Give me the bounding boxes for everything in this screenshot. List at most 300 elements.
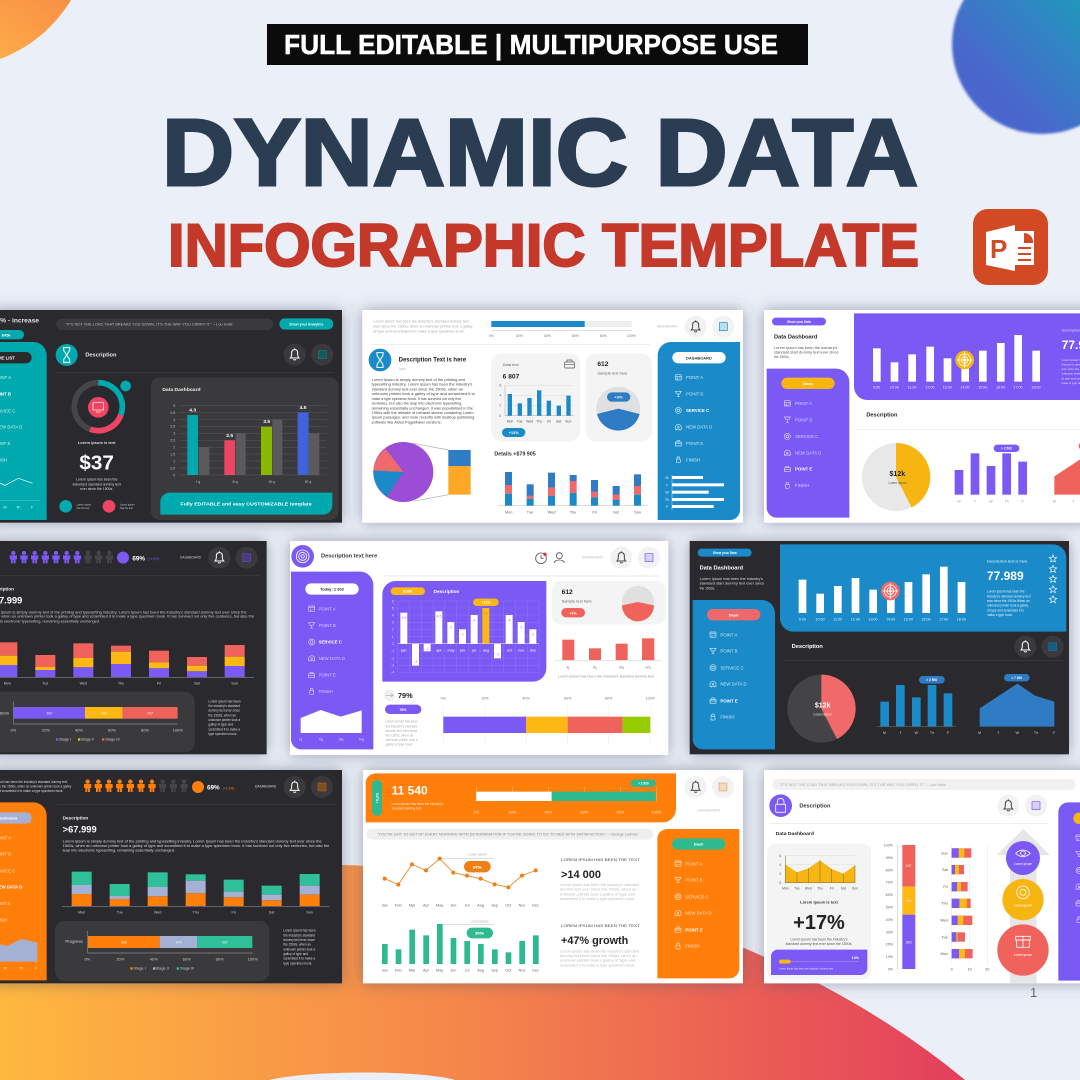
bar chart: 2 (173, 446, 175, 450)
body text: Lorem Ipsum is simply dummy text of the printing and (372, 378, 465, 382)
panel: hourly bar chart: 11:00 (908, 386, 916, 390)
progress bar: 20% (508, 810, 517, 814)
heading block: Lorem Ipsum has been the industry's (700, 577, 763, 581)
sidebar: NEW DATA D (720, 682, 747, 687)
metric: 79 percent: 78% (399, 708, 407, 712)
metric: 37 dollars: $37 (79, 451, 114, 474)
bar chart: IV q (305, 480, 311, 484)
metric: 37 dollars (73, 440, 121, 491)
metric: 47 percent growth: dummy text ever since the 1500s, when an (560, 954, 637, 958)
area chart: 6 (779, 854, 781, 858)
sidebar: POINT B (720, 649, 738, 654)
button: show analytics (279, 318, 333, 330)
bar chart: Oct (505, 969, 512, 973)
sidebar: POINT E (319, 673, 336, 678)
stacked bar chart: Mon (78, 910, 85, 914)
bar chart: 0 (499, 414, 501, 418)
panel: purple dark dashboard (0, 541, 267, 754)
heading block: Data Dashboard (700, 566, 744, 572)
panel: 612 sample: 612 (562, 589, 573, 596)
panel: progress chart: 389 (46, 711, 52, 715)
heading block: Lorem Ipsum has been the industry's (774, 346, 838, 350)
body text: remaining essentially unchanged. It was popularised in the (372, 406, 473, 410)
panel: progress chart: 80% (141, 728, 149, 733)
sidebar: SERVICE C (720, 665, 744, 670)
chart: details stacked bars: Details +$79 905 (494, 452, 536, 458)
heading: description: Description (792, 644, 823, 650)
panel: 612 sample: +3% (569, 611, 577, 615)
bar chart: Lorem ipsum (471, 919, 489, 923)
metric: 14 000: >14 000 (561, 869, 601, 881)
area chart: F (1053, 731, 1056, 735)
sidebar: POINT B (685, 878, 703, 883)
metric: 37 dollars: Lorem Ipsum has been the (76, 478, 117, 482)
side text: Lorem Ipsum has been (283, 929, 316, 933)
chart: details stacked bars: Mon (505, 510, 512, 514)
panel: hourly bar chart: 15:00 (904, 617, 913, 621)
bar chart: Fri (547, 419, 551, 423)
decorative bottom gradient shape (0, 865, 965, 1080)
side text: the 1500s, when an (208, 713, 236, 717)
metric: 47 percent growth: Lorem Ipsum has been the industry's standard (560, 949, 640, 953)
description text: leap into electronic typesetting, remaining essentially unchanged. (63, 849, 175, 853)
bar chart: III q (269, 480, 275, 484)
bar chart: Thu (536, 419, 542, 423)
stacked column chart: 0% (888, 967, 894, 971)
sidebar: SERVICE C (795, 434, 818, 439)
panel: progress chart: 60% (183, 957, 191, 962)
progress bar: 100% (651, 810, 662, 814)
panel: monthly bar chart: dec (530, 649, 536, 653)
panel: area chart and metric: +17% (793, 912, 845, 934)
horizontal stacked bar chart: 10 (968, 968, 972, 972)
progress banner: Lorem Ipsum has been the industry's dummy text (779, 968, 833, 971)
stacked bar chart: Wed (154, 910, 161, 914)
panel: teal dark dashboard (0, 310, 342, 523)
sidebar: FINISH (685, 944, 700, 949)
bar chart: M (883, 731, 886, 735)
legend: Lorem Ipsum (120, 504, 134, 507)
metric: 47 percent growth: unknown printer took a galley of type and (560, 959, 636, 963)
panel: 612 sample: Sample text here (597, 371, 628, 376)
bar chart: T (974, 499, 977, 503)
icon: target circle (291, 545, 314, 568)
panel: monthly bar chart: 6 (392, 599, 394, 603)
progress bar: 20% (516, 334, 523, 338)
stacked column chart: 80% (886, 868, 894, 872)
chart: details stacked bars: Tue (527, 510, 533, 514)
stacked bar chart (62, 872, 329, 914)
intro text: ever since the 1500s, when an unknown printer took a galley (373, 324, 473, 328)
line chart: Jan (382, 904, 388, 908)
chart: details stacked bars: Wed (548, 510, 556, 514)
bar chart: Aug (477, 969, 484, 973)
icon buttons: DASHBOARD (180, 556, 202, 560)
legend: Lorem Ipsum (77, 504, 91, 507)
chart: details stacked bars (494, 452, 648, 514)
panel: monthly bar chart: -3 (391, 664, 394, 668)
stacked bar chart: Thu (193, 910, 199, 914)
panel: progress chart: Stage I (59, 738, 71, 742)
panel: monthly bar chart: oct (507, 649, 512, 653)
bar chart: F (947, 731, 950, 735)
people icons (84, 779, 188, 792)
panel: monthly bar chart: 4.5 (437, 615, 441, 619)
side text: dummy text ever since (208, 709, 240, 713)
sidebar: F (666, 505, 668, 509)
bar chart: > 2 500 (926, 678, 937, 682)
horizontal stacked bar chart: 0 (951, 968, 953, 972)
panel: hourly bar chart: 15:00 (978, 386, 987, 390)
panel: progress chart: 0% (84, 957, 91, 962)
panel: area chart and metric: Lorem Ipsum is text (800, 899, 838, 904)
panel: purple light dashboard (764, 310, 1080, 523)
line chart: Jul (465, 904, 470, 908)
legend: has the text (120, 507, 133, 510)
chart: details stacked bars: Sun (634, 510, 641, 514)
metric: 14 000: dummy text ever since the 1500s, when an (560, 888, 637, 892)
area chart: M (978, 731, 981, 735)
bar chart (499, 384, 573, 423)
panel: hourly bar chart: 14:00 (886, 617, 895, 621)
panel: progress chart: Progress (65, 939, 83, 944)
stacked column chart: 70% (886, 881, 894, 885)
panel: monthly bar chart: 5 (485, 611, 487, 615)
metric: 69 percent: 69% (207, 785, 220, 792)
panel: hourly bar chart: 14:00 (960, 386, 970, 390)
icon: target (881, 582, 900, 600)
sidebar: FINISH (720, 715, 735, 720)
area chart: Mon (782, 886, 789, 890)
line chart: Jun (450, 904, 456, 908)
panel: progress chart: 204 (101, 711, 107, 715)
metric: 79 percent: the industry's standard (386, 724, 418, 728)
horizontal stacked bar chart: Tue (941, 935, 948, 939)
quote bar: "YOU'VE GOT TO GET UP EVERY MORNING WITH DETERMINATION IF YOU'RE GOING TO GO TO BED WITH SATISFACTION." – George Lorimer (377, 833, 639, 837)
sidebar (0, 342, 47, 520)
pie chart (787, 675, 856, 743)
metric: 79 percent: dummy text ever since (386, 729, 417, 733)
bar chart: quarters: IVq (645, 665, 651, 669)
side text: galley of type and (283, 952, 308, 956)
sidebar: Today: 1 302 (320, 587, 345, 592)
progress bar (489, 321, 636, 338)
heading: description text: Description Text is here (399, 357, 467, 363)
icon buttons: DASHBOARD (255, 784, 277, 788)
bar chart: $55k (475, 931, 485, 936)
body text: typesetting industry. Lorem Ipsum has been the industry's (372, 383, 473, 387)
side text: dummy text ever since (283, 938, 315, 942)
arrow with circles: Lorem ipsum (1014, 904, 1032, 908)
metric: 14 000: scrambled it to make a type specimen book. (560, 897, 635, 901)
side text: type specimen book. (208, 732, 237, 736)
panel: hourly bar chart (854, 313, 1080, 400)
area chart: Tue (794, 886, 800, 890)
heading block (774, 335, 839, 359)
sidebar: T (666, 483, 669, 487)
panel: 612 sample (585, 353, 652, 442)
sidebar: W (3, 506, 7, 510)
stacked column chart: 10% (886, 955, 894, 959)
pill: show data: Show your Data (713, 551, 737, 555)
pie chart (373, 442, 471, 502)
stacked progress bar: 80% (605, 697, 613, 701)
intro text (0, 780, 72, 793)
stacked column chart: 60% (886, 893, 894, 897)
icon buttons (1014, 636, 1064, 658)
subtitle: infographic template: INFOGRAPHIC TEMPLATE (168, 212, 919, 279)
bar chart: 3.5 (263, 419, 270, 425)
panel: hourly bar chart: 12:00 (925, 386, 935, 390)
stacked column chart: 389 (906, 940, 912, 944)
side text: the industry's standard (283, 933, 315, 937)
side text: scrambled it to make a (208, 727, 240, 731)
stacked bar chart: Mon (4, 682, 11, 686)
sidebar: POINT A (319, 606, 336, 611)
stacked column chart: 297 (906, 864, 912, 868)
bar chart: Mar (409, 969, 416, 973)
metric: 14 000: unknown printer took a galley of type and (560, 892, 636, 896)
panel: monthly bar chart: -4 (391, 671, 394, 675)
pill: show data: Show your Data (787, 320, 811, 324)
sidebar (657, 829, 739, 978)
panel: progress chart: Stage II (81, 738, 94, 742)
stacked bar chart: Wed (80, 682, 87, 686)
description text (63, 815, 329, 853)
icon: hourglass (369, 349, 391, 371)
sidebar: POINT A (685, 861, 702, 866)
panel: data text: +13% (509, 430, 519, 435)
panel: purple light dashboard 3 (764, 770, 1080, 983)
sidebar: SERVICE C (685, 894, 709, 899)
bar chart: quarters: IIIq (619, 665, 624, 669)
line chart: May (436, 904, 443, 908)
panel: data text: 6 807 (503, 373, 520, 380)
body text: standard dummy text ever since the 1500s, when an (372, 387, 463, 391)
sidebar: POINT E (795, 467, 812, 472)
panel: monthly bar chart: 3 (450, 625, 452, 629)
icon buttons (255, 776, 333, 798)
icons: stars (1049, 555, 1057, 603)
panel: hourly bar chart: 12:00 (851, 617, 860, 621)
panel: monthly bar chart: -2 (391, 656, 394, 660)
line chart: Lorem ipsum (468, 853, 487, 857)
side text: unknown printer took a (283, 947, 316, 951)
description text: Description (63, 815, 88, 820)
quote bar: "IT'S NOT THE LOAD THAT BREAKS YOU DOWN, IT'S THE WAY YOU CARRY IT." – Lou Holtz (779, 783, 946, 787)
stacked progress bar (441, 697, 656, 746)
horizontal stacked bar chart: 20 (985, 968, 989, 972)
panel: progress chart: 40% (150, 957, 158, 962)
bar chart: 4.5 (300, 405, 307, 411)
sidebar: Th (16, 506, 20, 510)
panel: progress chart: 389 (121, 940, 127, 944)
body text: software like Aldus PageMaker versions. (372, 421, 442, 425)
line chart: Mar (409, 904, 416, 908)
sidebar (0, 802, 47, 980)
bar chart: W (915, 731, 919, 735)
panel: top orange metric: standard dummy text (392, 807, 421, 811)
side text: unknown printer took a (208, 718, 241, 722)
sidebar: F (36, 966, 39, 970)
bar chart: > 2 500 (1001, 447, 1012, 451)
sidebar: POINT B (686, 392, 703, 397)
bar chart: Dec (532, 969, 539, 973)
sidebar: Iq (299, 738, 302, 742)
sidebar: W (665, 491, 669, 495)
sidebar: Dash (694, 842, 704, 847)
bar chart: Sep (491, 969, 498, 973)
icon buttons (180, 547, 258, 569)
heading block: Data Dashboard (774, 335, 818, 341)
stacked bar chart: Thu (118, 682, 124, 686)
panel: 612 sample: +3% (615, 395, 623, 400)
sidebar: DASHBOARD (686, 355, 712, 360)
area chart: 0 (779, 881, 781, 885)
panel: area chart and metric: standard dummy text ever since the 1500s. (786, 942, 852, 946)
bar chart: quarters: IIq (593, 665, 597, 669)
description text: 1500s, when an unknown printer took a galley of type and scrambled it to make a type specimen book. It has survived not only five centuries, but also the (63, 844, 329, 848)
intro text (373, 320, 473, 333)
sidebar: NEW DATA D (685, 911, 712, 916)
bar chart: Apr (423, 969, 430, 973)
panel: data text (491, 353, 580, 442)
line chart: Feb (395, 904, 402, 908)
bar chart: Nov (519, 969, 525, 973)
metric: 37 dollars: ever since the 1500s. (80, 487, 113, 491)
bar chart: T (899, 731, 902, 735)
bar chart: 0.5 (170, 466, 175, 470)
panel: hourly bar chart: 9:00 (873, 386, 880, 390)
panel: progress chart: 204 (176, 940, 182, 944)
metric: 14 000 (560, 857, 641, 901)
horizontal stacked bar chart (940, 844, 989, 972)
line chart: Apr (423, 904, 430, 908)
stacked column chart: 40% (886, 918, 894, 922)
panel: progress chart (0, 692, 195, 752)
bar chart: Wed (526, 419, 533, 423)
bar chart: Jun (450, 969, 456, 973)
line chart: Nov (519, 904, 525, 908)
panel: monthly bar chart: +12% (482, 601, 490, 605)
side text (208, 699, 241, 736)
pie chart: Lorem ipsum (814, 712, 832, 716)
icon: hourglass (56, 344, 78, 366)
sidebar (658, 342, 740, 520)
stacked bar chart: Sat (269, 910, 274, 914)
bar chart: Th (1005, 499, 1009, 503)
body text (372, 378, 475, 425)
bar chart: 0 (173, 473, 175, 477)
panel: hourly bar chart: unknown printer took a galley (987, 604, 1028, 608)
icon buttons (685, 776, 734, 813)
panel: hourly bar chart: 10:00 (815, 617, 825, 621)
sidebar: IIIq (339, 738, 343, 742)
metric: 37 dollars: industry's standard dummy text (73, 482, 121, 486)
bar chart: 2.5 (226, 433, 233, 439)
line chart: $45k (473, 864, 483, 869)
page number: 1 (1030, 985, 1037, 1000)
heading block: standard start dummy text ever since (774, 350, 839, 354)
arrow with circles: Lorem ipsum (1014, 862, 1032, 866)
sidebar (291, 572, 373, 749)
area chart (1053, 442, 1080, 503)
heading: data dashboard: Data Dashboard (776, 831, 814, 837)
panel: monthly bar chart: apr (436, 649, 442, 653)
sidebar: POINT B (795, 417, 812, 422)
sidebar: POINT E (686, 441, 703, 446)
panel: monthly bar chart: 1 (392, 635, 394, 639)
stacked progress bar: 100% (646, 697, 656, 701)
bar chart (955, 445, 1027, 503)
bar chart: 4.3 (189, 408, 196, 414)
panel: hourly bar chart: of type and scrambled it to (987, 608, 1024, 612)
side text (283, 929, 316, 965)
heading block: the 1500s. (700, 586, 715, 590)
heading block: the 1500s. (774, 355, 790, 359)
panel: progress chart: 20% (42, 728, 50, 733)
panel: monthly bar chart: 4.3 (402, 616, 406, 620)
bar chart: 1 (173, 459, 175, 463)
panel: progress chart: 20% (116, 957, 125, 962)
decorative orange corner (0, 0, 71, 59)
icon: powerpoint: P (990, 234, 1007, 264)
heading block (700, 566, 764, 590)
panel: hourly bar chart: Description text is here (987, 559, 1028, 564)
sidebar: POINT A (795, 401, 812, 406)
sidebar: FINISH (795, 483, 809, 488)
panel: monthly bar chart: 4 (473, 619, 475, 623)
body text: centuries, but also the leap into electronic typesetting, (372, 402, 462, 406)
side text: type specimen book. (283, 961, 312, 965)
quote bar: "IT'S NOT THE LOAD THAT BREAKS YOU DOWN, IT'S THE WAY YOU CARRY IT." – Lou Holtz (65, 323, 233, 327)
side text: the 1500s, when an (283, 943, 311, 947)
stacked bar chart: Sat (194, 682, 200, 686)
stacked column chart (884, 844, 915, 971)
bar chart: Sun (565, 419, 571, 423)
bar chart: 4 (499, 394, 501, 398)
sidebar: M (666, 476, 669, 480)
banner: editable: Fully EDITABLE and easy CUSTOMIZABLE template (180, 501, 312, 506)
panel: area chart and metric: Lorem Ipsum has been the industry's (790, 937, 848, 941)
icon buttons: DASHBOARD (582, 556, 604, 560)
area chart (779, 854, 858, 890)
area chart (978, 674, 1056, 735)
area chart: Th (1034, 731, 1038, 735)
heading: description: Description (866, 413, 898, 419)
stacked column chart: 100% (884, 844, 894, 848)
panel: monthly bar chart: -1 (391, 649, 394, 653)
stacked bar chart: Tue (117, 910, 123, 914)
sidebar: SERVICE C (686, 408, 709, 413)
sidebar: NEW DATA D (319, 656, 345, 661)
panel: progress chart: Stage II (156, 967, 169, 971)
panel: monthly bar chart: 3 (520, 625, 522, 629)
sidebar: F (31, 506, 34, 510)
icon buttons (997, 795, 1047, 817)
horizontal stacked bar chart: Sun (941, 851, 948, 855)
line chart: Sep (491, 904, 498, 908)
bar chart: 6 (499, 384, 501, 388)
bar chart (170, 404, 327, 484)
panel: hourly bar chart: ever since the 1500s.When an (987, 599, 1030, 603)
panel: progress chart: 80% (216, 957, 224, 962)
sidebar: IIq (319, 738, 323, 742)
heading block: standard start dummy text ever since (700, 582, 764, 586)
panel: hourly bar chart: 77.989 (987, 569, 1024, 583)
line chart (382, 853, 539, 908)
sidebar: W (4, 966, 8, 970)
